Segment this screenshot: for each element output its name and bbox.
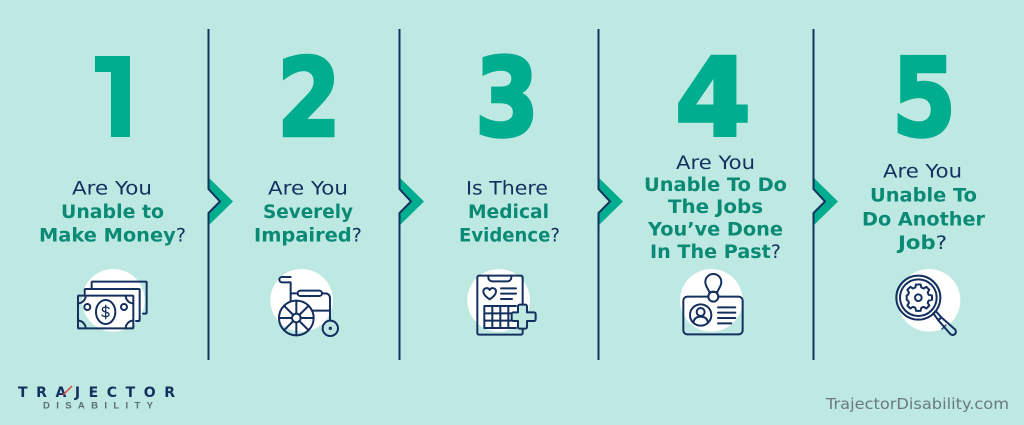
number 1: 1 [80, 36, 155, 162]
number 1 [95, 56, 130, 137]
website URL: TrajectorDisability.com [825, 395, 1009, 413]
step 5 [862, 36, 986, 335]
step 4 question: Unable To Do [644, 175, 787, 196]
step 4 question: You’ve Done [647, 220, 783, 240]
step 5 question: Unable To [870, 186, 977, 206]
step 3 [459, 36, 560, 335]
number 3: 3 [475, 36, 539, 162]
divider 3 with chevron [598, 29, 623, 360]
step 2 [254, 36, 362, 336]
number 2: 2 [277, 36, 341, 162]
logo: Trajector Disability [18, 385, 175, 412]
step 5 question: Are You [883, 162, 962, 182]
step 1 question [39, 178, 186, 246]
step 3 question: Medical [468, 202, 549, 223]
step 1 question: Are You [72, 178, 152, 200]
step 5 question [862, 162, 986, 254]
step 2 question: Are You [268, 178, 348, 200]
number 5: 5 [892, 36, 956, 162]
icon: magnifying glass with gear [896, 269, 960, 335]
step 1 [39, 36, 186, 332]
step 4 question: The Jobs [668, 197, 763, 218]
step 5 question: Do Another [862, 210, 986, 230]
step 4 [644, 36, 787, 334]
step 2 question [254, 178, 362, 246]
logo: Trajector Disability: TRAJECTOR [18, 385, 175, 401]
step 1 question: Make Money ? [39, 226, 186, 246]
step 3 question [459, 178, 560, 246]
step 2 question: Impaired? [254, 226, 362, 246]
step 3 question: Is There [466, 178, 548, 200]
icon: medical clipboard [467, 269, 536, 335]
step 2 question: Severely [263, 202, 353, 223]
divider 4 with chevron [814, 29, 838, 360]
number 4: 4 [675, 36, 751, 162]
logo: Trajector Disability: DISABILITY [43, 400, 154, 412]
icon: ID badge [680, 269, 743, 334]
step 4 question: In The Past? [650, 242, 781, 263]
divider 1 with chevron [208, 29, 233, 360]
step 4 question [644, 153, 787, 263]
icon: money [78, 269, 147, 332]
divider 2 with chevron [400, 29, 424, 360]
step 5 question: Job ? [896, 233, 947, 254]
step 4 question: Are You [676, 153, 755, 174]
icon: wheelchair [270, 269, 338, 336]
step 1 question: Unable to [61, 202, 164, 223]
logo red slash [63, 386, 72, 395]
step 3 question: Evidence? [459, 226, 560, 246]
